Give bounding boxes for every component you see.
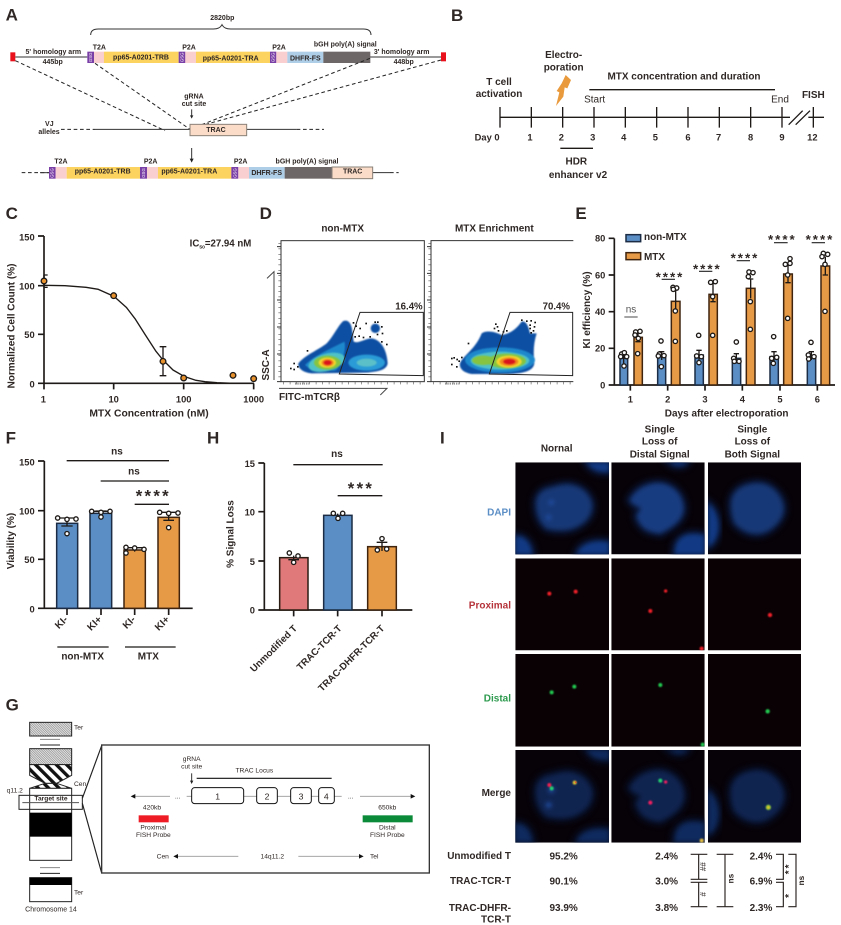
distal probe: 650kb bbox=[378, 804, 397, 811]
panel E: KI efficiency bars bbox=[575, 204, 835, 420]
percentages: 90.1% bbox=[550, 876, 578, 887]
target TRAC allele: VJ bbox=[45, 121, 54, 128]
significance marks: **** bbox=[731, 250, 759, 265]
axes: 5 bbox=[777, 395, 783, 405]
axes: 150 bbox=[19, 458, 35, 468]
axis titles bbox=[261, 272, 387, 403]
cut site label bbox=[181, 756, 203, 784]
axes: 150 bbox=[19, 233, 35, 243]
axes bbox=[6, 458, 193, 615]
DAPI row bbox=[515, 462, 801, 554]
comparison brackets: # bbox=[699, 892, 708, 897]
edited allele: bGH poly(A) signal bbox=[276, 159, 338, 166]
data points bbox=[618, 251, 830, 369]
axes: 3 bbox=[702, 395, 708, 405]
x labels bbox=[53, 614, 176, 663]
day labels: 2 bbox=[559, 133, 564, 143]
panel letter G: G bbox=[6, 696, 19, 715]
proximal probe: Proximal bbox=[140, 824, 167, 831]
day labels: 5 bbox=[653, 133, 658, 143]
day labels bbox=[475, 133, 818, 143]
percentages: 95.2% bbox=[550, 851, 578, 862]
row labels: Distal bbox=[484, 694, 511, 705]
chromosome 14 bbox=[7, 722, 87, 913]
comparison brackets: ** bbox=[784, 862, 795, 874]
icon: lightning bbox=[556, 75, 571, 106]
significance marks: ns bbox=[111, 446, 123, 457]
donor construct: 445bp bbox=[43, 59, 63, 66]
day labels: 9 bbox=[779, 133, 785, 143]
orientation axis: Tel bbox=[370, 853, 379, 860]
genomic line with exons bbox=[131, 788, 415, 804]
axes: 0 bbox=[250, 606, 255, 616]
donor construct bbox=[10, 42, 446, 66]
T cell activation: T cell bbox=[486, 77, 512, 88]
significance marks: **** bbox=[806, 232, 834, 247]
edited allele: P2A bbox=[234, 159, 247, 166]
significance marks bbox=[624, 232, 834, 317]
donor construct: P2A bbox=[272, 44, 286, 51]
donor construct: 3' homology arm bbox=[374, 49, 429, 56]
panel D: flow cytometry bbox=[260, 204, 573, 403]
donor construct: bGH poly(A) signal bbox=[314, 42, 377, 49]
comparison brackets: ## bbox=[699, 862, 708, 871]
row labels: DAPI bbox=[487, 508, 511, 519]
axes: 10 bbox=[245, 508, 255, 518]
axes: 6 bbox=[815, 395, 820, 405]
genomic line with exons: 1 bbox=[215, 791, 220, 801]
column headings: Loss of bbox=[642, 437, 678, 448]
axes: Viability (%) bbox=[6, 513, 17, 569]
comparison brackets: ns bbox=[725, 873, 735, 884]
panel letter A: A bbox=[6, 6, 18, 25]
donor construct: GSG bbox=[179, 52, 184, 62]
chromosome 14: Ter bbox=[74, 724, 84, 731]
panel letter H: H bbox=[207, 428, 219, 447]
axes: 50 bbox=[24, 330, 35, 340]
zoomed TRAC locus box bbox=[102, 745, 429, 873]
flow plot: MTX enrichment bbox=[427, 241, 573, 384]
panel I: FISH images bbox=[440, 425, 801, 843]
axes: 100 bbox=[19, 506, 35, 516]
target site box bbox=[19, 746, 102, 873]
panel G: chromosome schematic bbox=[6, 696, 429, 913]
percentages: 2.4% bbox=[750, 851, 772, 862]
proximal probe bbox=[136, 804, 171, 839]
axes: 10 bbox=[108, 395, 119, 405]
comparison brackets bbox=[691, 854, 806, 907]
timeline axis bbox=[500, 107, 824, 128]
x labels: non-MTX bbox=[61, 652, 104, 663]
axes: 20 bbox=[595, 344, 605, 354]
error bars and points bbox=[287, 511, 389, 564]
data points bbox=[41, 275, 256, 381]
column headings: Distal Signal bbox=[630, 450, 690, 461]
panel letter I: I bbox=[440, 428, 445, 447]
edited allele: DHFR-FS bbox=[251, 170, 282, 177]
IC50 label: =27.94 nM bbox=[205, 239, 251, 250]
brace 2820bp bbox=[91, 15, 371, 35]
axes: 50 bbox=[24, 555, 35, 565]
electroporation: poration bbox=[544, 63, 584, 74]
axes: 2 bbox=[665, 395, 670, 405]
axes bbox=[6, 233, 264, 420]
arrow down bbox=[190, 148, 194, 163]
row names: TRAC-DHFR- bbox=[449, 903, 511, 914]
target TRAC allele: alleles bbox=[38, 129, 60, 136]
orientation axis: Cen bbox=[157, 853, 169, 860]
significance marks: ns bbox=[626, 305, 636, 316]
bars bbox=[57, 513, 179, 608]
distal row bbox=[515, 654, 801, 747]
day labels: 12 bbox=[807, 133, 818, 143]
percentages: 2.3% bbox=[750, 903, 772, 914]
percentages bbox=[550, 851, 772, 914]
target TRAC allele: TRAC bbox=[206, 127, 226, 134]
axes: 40 bbox=[595, 307, 605, 317]
column headings: Loss of bbox=[735, 437, 771, 448]
edited allele: P2A bbox=[144, 159, 157, 166]
IC50 label: IC bbox=[190, 239, 199, 250]
MTX duration bbox=[584, 72, 789, 106]
axes: 100 bbox=[176, 395, 191, 405]
axes: 100 bbox=[19, 281, 35, 291]
day labels: 4 bbox=[621, 133, 627, 143]
axes: % Signal Loss bbox=[226, 500, 237, 568]
axes: 80 bbox=[595, 234, 605, 244]
significance marks bbox=[293, 449, 383, 498]
merge row bbox=[515, 750, 801, 843]
flow plot: MTX enrichment: 70.4% bbox=[543, 302, 570, 313]
panel C: IC50 curve bbox=[6, 204, 264, 420]
axes: 60 bbox=[595, 270, 605, 280]
donor construct: 5' homology arm bbox=[26, 49, 81, 56]
row labels: Merge bbox=[482, 788, 511, 799]
MTX duration: End bbox=[771, 95, 789, 106]
T cell activation: activation bbox=[476, 89, 522, 100]
x labels: MTX bbox=[138, 652, 159, 663]
error bars bbox=[621, 257, 828, 363]
fitted curve bbox=[44, 285, 254, 383]
x labels: KI- bbox=[121, 614, 138, 632]
day labels: 3 bbox=[590, 133, 595, 143]
donor construct: DHFR-FS bbox=[290, 56, 321, 63]
genomic line with exons: 3 bbox=[299, 791, 304, 801]
plot titles: MTX Enrichment bbox=[455, 224, 534, 235]
target site box: Target site bbox=[34, 796, 68, 803]
legend: non-MTX bbox=[644, 232, 687, 243]
axes: 0 bbox=[29, 379, 35, 389]
significance marks: **** bbox=[136, 487, 171, 506]
legend: MTX bbox=[644, 252, 665, 263]
day labels: 7 bbox=[716, 133, 721, 143]
x labels: TRAC-TCR-T bbox=[295, 623, 345, 673]
panel H: signal loss bars bbox=[207, 428, 412, 694]
brace 2820bp: 2820bp bbox=[210, 15, 234, 22]
axes: MTX Concentration (nM) bbox=[89, 409, 209, 420]
axes: 1 bbox=[628, 395, 633, 405]
proximal row bbox=[515, 558, 801, 651]
axes: 0 bbox=[29, 604, 35, 614]
axes: 5 bbox=[250, 557, 255, 567]
axis titles: FITC-mTCRβ bbox=[279, 392, 340, 403]
FISH: FISH bbox=[802, 90, 825, 101]
edited allele: pp65-A0201-TRB bbox=[75, 169, 131, 176]
panel letter E: E bbox=[575, 204, 587, 223]
panel B: timeline bbox=[451, 6, 825, 181]
axes: Days after electroporation bbox=[665, 409, 789, 420]
genomic line with exons: ... bbox=[175, 794, 181, 801]
distal probe: FISH Probe bbox=[370, 832, 405, 839]
edited allele: pp65-A0201-TRA bbox=[161, 169, 217, 176]
cut site label: cut site bbox=[181, 764, 203, 771]
row names: TRAC-TCR-T bbox=[450, 876, 511, 887]
percentages: 6.9% bbox=[750, 876, 772, 887]
significance marks: **** bbox=[768, 232, 797, 247]
donor construct: T2A bbox=[93, 44, 106, 51]
significance marks: ns bbox=[331, 449, 343, 460]
locus bar: TRAC Locus bbox=[235, 767, 274, 774]
x labels: TRAC-DHFR-TCR-T bbox=[316, 623, 387, 694]
MTX duration: MTX concentration and duration bbox=[607, 72, 761, 83]
donor construct: pp65-A0201-TRA bbox=[203, 56, 259, 63]
plot titles bbox=[321, 224, 534, 235]
bars bbox=[620, 266, 830, 385]
significance marks bbox=[67, 446, 171, 506]
comparison brackets: ns bbox=[796, 875, 806, 886]
flow plot: non-MTX bbox=[277, 241, 424, 384]
axes: 1000 bbox=[243, 395, 264, 405]
edited allele: GSG bbox=[50, 168, 55, 178]
x labels bbox=[248, 623, 387, 694]
donor construct: 448bp bbox=[394, 59, 414, 66]
x labels: KI- bbox=[53, 614, 70, 632]
donor construct: GSG bbox=[88, 52, 93, 62]
proximal probe: 420kb bbox=[143, 804, 161, 811]
column headings: Nornal bbox=[541, 444, 573, 455]
cut site label: gRNA bbox=[183, 756, 201, 763]
percentages: 93.9% bbox=[550, 903, 578, 914]
column headings: Single bbox=[737, 425, 768, 436]
day labels: 0 bbox=[494, 133, 500, 143]
dashed insertion guides bbox=[15, 58, 441, 131]
day labels: Day bbox=[475, 133, 493, 143]
axes: KI efficiency (%) bbox=[582, 271, 593, 349]
x labels: KI+ bbox=[85, 614, 105, 633]
x labels: Unmodified T bbox=[248, 623, 300, 675]
comparison brackets: * bbox=[784, 894, 795, 898]
proximal probe: FISH Probe bbox=[136, 832, 171, 839]
donor construct: pp65-A0201-TRB bbox=[113, 55, 169, 62]
target TRAC allele: cut site bbox=[182, 101, 206, 108]
panel A: knock-in construct bbox=[6, 6, 446, 179]
distal probe: Distal bbox=[379, 824, 396, 831]
significance marks: *** bbox=[348, 479, 374, 498]
MTX duration: Start bbox=[584, 95, 605, 106]
locus bar bbox=[197, 767, 332, 778]
panel letter B: B bbox=[451, 6, 463, 25]
distal probe bbox=[363, 804, 413, 839]
edited allele bbox=[22, 159, 399, 179]
plot titles: non-MTX bbox=[321, 224, 364, 235]
HDR enhancer: HDR bbox=[566, 157, 587, 168]
row names bbox=[447, 851, 511, 925]
error bars and points bbox=[55, 509, 180, 555]
flow plot: non-MTX: 16.4% bbox=[395, 302, 423, 313]
chromosome 14: Chromosome 14 bbox=[25, 906, 77, 913]
axes: 0 bbox=[600, 380, 605, 390]
row names: Unmodified T bbox=[447, 851, 511, 862]
legend bbox=[626, 232, 687, 263]
chromosome 14: Ter bbox=[74, 890, 84, 897]
IC50 label: 50 bbox=[199, 244, 205, 250]
FISH summary table bbox=[447, 851, 806, 925]
genomic line with exons: 2 bbox=[265, 791, 270, 801]
orientation axis: 14q11.2 bbox=[261, 854, 284, 861]
percentages: 3.8% bbox=[655, 903, 678, 914]
chromosome 14: q11.2 bbox=[7, 788, 23, 795]
edited allele: GSG bbox=[232, 168, 237, 178]
orientation axis bbox=[157, 853, 379, 861]
electroporation: Electro- bbox=[545, 50, 582, 61]
axes: 1 bbox=[41, 395, 46, 405]
axes: Normalized Cell Count (%) bbox=[6, 264, 17, 388]
bars bbox=[280, 515, 396, 610]
edited allele: T2A bbox=[54, 159, 68, 166]
row labels bbox=[469, 508, 511, 799]
percentages: 2.4% bbox=[655, 851, 678, 862]
panel letter D: D bbox=[260, 204, 272, 223]
axes bbox=[582, 234, 835, 420]
column headings bbox=[541, 425, 780, 461]
row labels: Proximal bbox=[469, 601, 511, 612]
panel F: viability bars bbox=[6, 428, 193, 663]
significance marks: **** bbox=[656, 270, 684, 285]
HDR enhancer: enhancer v2 bbox=[549, 170, 608, 181]
day labels: 6 bbox=[685, 133, 691, 143]
column headings: Both Signal bbox=[725, 450, 780, 461]
donor construct: GSG bbox=[271, 52, 276, 62]
column headings: Single bbox=[645, 425, 675, 436]
x labels: KI+ bbox=[153, 614, 172, 633]
axes: 4 bbox=[740, 395, 746, 405]
axes: 15 bbox=[245, 459, 255, 469]
donor construct: P2A bbox=[182, 44, 196, 51]
HDR enhancer bbox=[549, 148, 608, 181]
genomic line with exons: 4 bbox=[324, 791, 329, 801]
significance marks: ns bbox=[128, 466, 140, 477]
day labels: 1 bbox=[527, 133, 533, 143]
axis titles: SSC-A bbox=[261, 349, 272, 381]
target TRAC allele: gRNA bbox=[184, 93, 204, 100]
panel letter F: F bbox=[6, 428, 16, 447]
chromosome 14: Cen bbox=[74, 781, 87, 788]
day labels: 8 bbox=[748, 133, 753, 143]
target TRAC allele bbox=[38, 93, 324, 136]
axes bbox=[226, 459, 412, 616]
significance marks: **** bbox=[693, 261, 722, 276]
percentages: 3.0% bbox=[655, 876, 678, 887]
genomic line with exons: ... bbox=[348, 794, 354, 801]
edited allele: GSG bbox=[141, 168, 146, 178]
panel letter C: C bbox=[6, 204, 18, 223]
edited allele: TRAC bbox=[343, 169, 362, 176]
